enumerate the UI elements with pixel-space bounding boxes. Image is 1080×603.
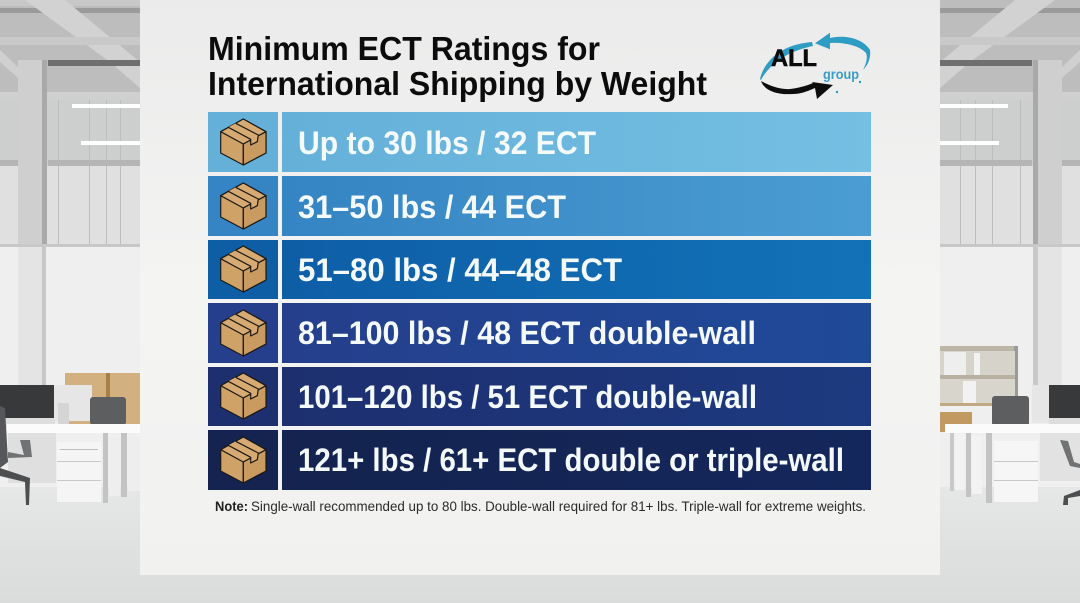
note: Note: bbox=[215, 498, 248, 514]
title: International Shipping by Weight bbox=[208, 65, 707, 102]
white centre panel bbox=[140, 0, 940, 575]
row 5: 101–120 lbs: 101–120 lbs / 51 ECT double-wall bbox=[298, 379, 757, 415]
right ceiling and wall bbox=[940, 0, 1080, 487]
row 4: 81–100 lbs: 81–100 lbs / 48 ECT double-wall bbox=[298, 315, 756, 351]
row 3: 51–80 lbs: 51–80 lbs / 44–48 ECT bbox=[298, 252, 622, 288]
row 6: 121+ lbs bbox=[208, 430, 871, 490]
logo black swoosh arrow bbox=[761, 81, 833, 99]
row 4: 81–100 lbs bbox=[208, 303, 871, 363]
row 3: 51–80 lbs bbox=[208, 240, 871, 299]
logo wordmark: ALL bbox=[771, 45, 817, 72]
logo blue swoosh arrow bbox=[760, 33, 870, 80]
icon: cardboard box bbox=[208, 303, 278, 363]
left office furniture bbox=[0, 373, 140, 505]
right office furniture bbox=[940, 346, 1080, 505]
icon: cardboard box bbox=[208, 112, 278, 172]
title bbox=[208, 30, 707, 102]
icon: cardboard box bbox=[208, 430, 278, 490]
note: Single-wall recommended up to 80 lbs. Double-wall required for 81+ lbs. Triple-wall for extreme weights. bbox=[251, 498, 866, 514]
row 2: 31–50 lbs bbox=[208, 176, 871, 236]
row 1: up to 30 lbs: Up to 30 lbs / 32 ECT bbox=[298, 125, 596, 161]
title: Minimum ECT Ratings for bbox=[208, 30, 600, 67]
logo: ALL group bbox=[760, 33, 870, 99]
icon: cardboard box bbox=[208, 240, 278, 299]
row 6: 121+ lbs: 121+ lbs / 61+ ECT double or triple-wall bbox=[298, 442, 844, 478]
row 1: up to 30 lbs bbox=[208, 112, 871, 172]
floor bbox=[0, 487, 1080, 603]
icon: cardboard box bbox=[208, 367, 278, 426]
logo: ALL group: group bbox=[823, 67, 859, 82]
icon: cardboard box bbox=[208, 176, 278, 236]
row 2: 31–50 lbs: 31–50 lbs / 44 ECT bbox=[298, 189, 566, 225]
row 5: 101–120 lbs bbox=[208, 367, 871, 426]
left ceiling and wall bbox=[0, 0, 140, 487]
